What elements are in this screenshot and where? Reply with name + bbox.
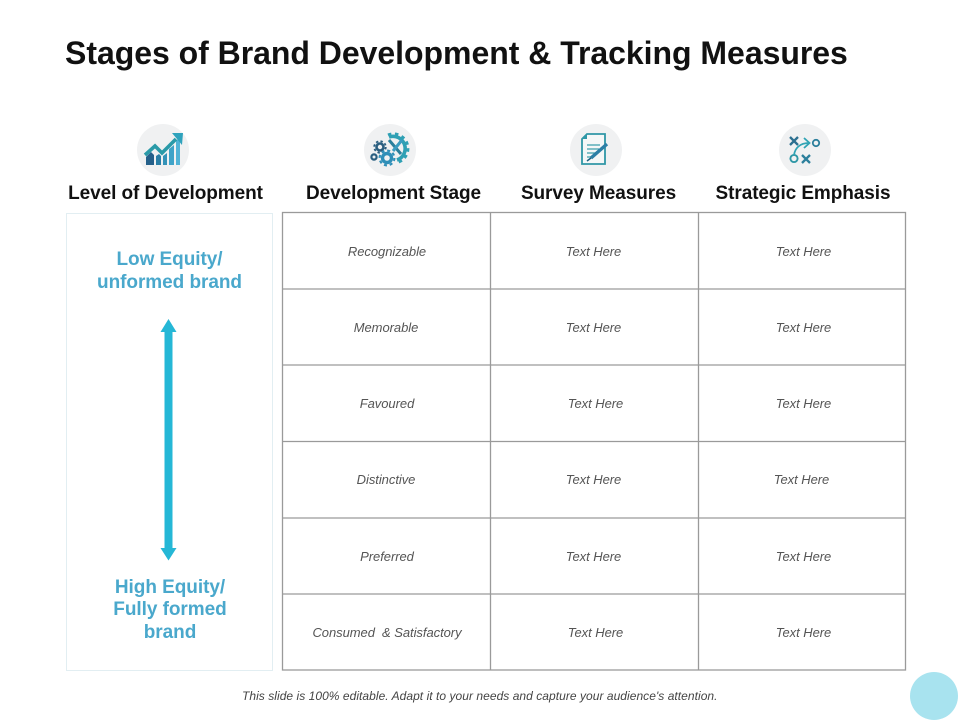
high equity label: Fully formed	[113, 599, 227, 620]
row 5: preferred: Preferred	[360, 548, 414, 564]
icon: growth chart	[137, 124, 189, 176]
heading: strategic emphasis: Strategic Emphasis	[716, 182, 890, 204]
icon: strategy play	[779, 124, 831, 176]
row 2: memorable	[354, 320, 831, 334]
table grid	[282, 212, 906, 671]
footer note: This slide is 100% editable. Adapt it to your needs and capture your audience's attention.	[242, 689, 718, 703]
row 1: recognizable: Recognizable	[348, 244, 426, 258]
heading: survey measures: Survey Measures	[521, 182, 676, 204]
row 6: consumed and satisfactory	[312, 624, 831, 640]
row 6: consumed and satisfactory: Text Here	[776, 624, 831, 640]
heading: development stage: Development Stage	[306, 182, 481, 204]
icon: gears and wrench	[364, 124, 416, 176]
row 4: distinctive: Text Here	[774, 472, 829, 486]
row 5: preferred	[360, 548, 831, 564]
row 5: preferred: Text Here	[776, 548, 831, 564]
row 3: favoured	[360, 396, 831, 410]
heading: level of development: Level of Development	[68, 182, 263, 204]
low equity label: unformed brand	[97, 272, 242, 293]
row 2: memorable: Text Here	[566, 320, 621, 334]
row 6: consumed and satisfactory: Text Here	[568, 624, 623, 640]
low equity label: Low Equity/	[116, 249, 223, 270]
row 4: distinctive	[357, 472, 829, 486]
row 6: consumed and satisfactory: Consumed & Satisfactory	[312, 624, 462, 640]
row 3: favoured: Favoured	[360, 396, 414, 410]
decorative circle	[910, 672, 958, 720]
row 3: favoured: Text Here	[568, 396, 623, 410]
row 4: distinctive: Text Here	[566, 472, 621, 486]
row 2: memorable: Text Here	[776, 320, 831, 334]
high equity label: High Equity/	[115, 576, 225, 598]
row 1: recognizable	[348, 244, 831, 258]
high equity label	[113, 576, 227, 643]
row 1: recognizable: Text Here	[776, 244, 831, 258]
row 1: recognizable: Text Here	[566, 244, 621, 258]
row 3: favoured: Text Here	[776, 396, 831, 410]
title: Stages of Brand Development & Tracking Measures	[65, 35, 848, 71]
row 5: preferred: Text Here	[566, 548, 621, 564]
panel: level of development	[66, 213, 273, 671]
arrow: equity scale	[160, 319, 176, 560]
low equity label	[97, 249, 242, 293]
row 4: distinctive: Distinctive	[357, 472, 415, 486]
high equity label: brand	[144, 622, 196, 643]
row 2: memorable: Memorable	[354, 320, 418, 334]
icon: document and pen	[570, 124, 622, 176]
